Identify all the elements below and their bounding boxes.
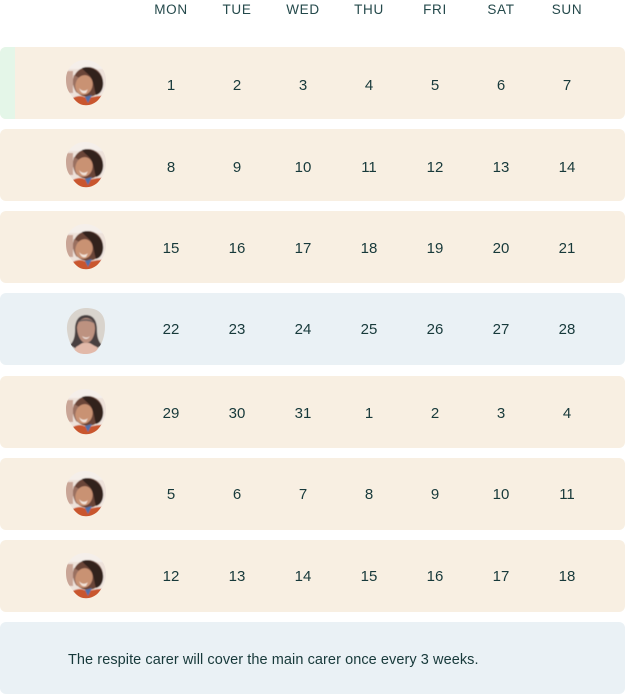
week 1 row: main carer: 4	[365, 77, 373, 94]
week 4 row: respite carer: 23	[229, 321, 245, 338]
week 7 row: main carer: 12	[163, 568, 179, 585]
week 5 row: main carer: 1	[365, 405, 373, 422]
avatar: respite carer	[67, 308, 105, 354]
week 7 row: main carer: 14	[295, 568, 311, 585]
avatar: main carer	[66, 148, 106, 188]
week 1 row: main carer: 2	[233, 77, 241, 94]
avatar: main carer	[66, 66, 106, 106]
week 3 row: main carer: 19	[427, 240, 443, 257]
week 2 row: main carer: 11	[361, 159, 377, 176]
avatar: main carer	[66, 559, 106, 598]
week 5 row: main carer: 4	[563, 405, 571, 422]
week 7 row: main carer: 13	[229, 568, 245, 585]
week 4 row: respite carer: 22	[163, 321, 179, 338]
week 1 row: main carer: 5	[431, 77, 439, 94]
week 4 row: respite carer: 24	[295, 321, 311, 338]
weekday header: THU	[354, 2, 384, 17]
week 3 row: main carer: 18	[361, 240, 377, 257]
week 3 row: main carer: 20	[493, 240, 509, 257]
week 6 row: main carer	[0, 458, 625, 530]
week 6 row: main carer: 9	[431, 486, 439, 503]
week 4 row: respite carer: 25	[361, 321, 377, 338]
week 4 row: respite carer: 26	[427, 321, 443, 338]
week 5 row: main carer: 30	[229, 405, 245, 422]
week 7 row: main carer	[0, 540, 625, 612]
avatar: main carer	[66, 477, 106, 516]
week 7 row: main carer: 16	[427, 568, 443, 585]
weekday header: WED	[286, 2, 320, 17]
week 2 row: main carer: 9	[233, 159, 241, 176]
week 2 row: main carer: 10	[295, 159, 311, 176]
week 1 row: main carer	[0, 47, 625, 119]
current week accent	[0, 47, 15, 119]
avatar: main carer	[66, 230, 106, 270]
weekday header: SUN	[552, 2, 582, 17]
avatar: main carer	[66, 395, 106, 434]
week 2 row: main carer: 13	[493, 159, 509, 176]
week 6 row: main carer: 7	[299, 486, 307, 503]
weekday header: FRI	[423, 2, 447, 17]
week 1 row: main carer: 6	[497, 77, 505, 94]
week 6 row: main carer: 6	[233, 486, 241, 503]
week 2 row: main carer: 14	[559, 159, 575, 176]
week 1 row: main carer: 7	[563, 77, 571, 94]
week 2 row: main carer: 12	[427, 159, 443, 176]
week 3 row: main carer: 21	[559, 240, 575, 257]
week 6 row: main carer: 8	[365, 486, 373, 503]
week 4 row: respite carer: 28	[559, 321, 575, 338]
week 6 row: main carer: 10	[493, 486, 509, 503]
week 2 row: main carer	[0, 129, 625, 201]
weekday header: SAT	[487, 2, 515, 17]
week 5 row: main carer: 3	[497, 405, 505, 422]
week 6 row: main carer: 11	[559, 486, 575, 503]
week 5 row: main carer	[0, 376, 625, 448]
week 1 row: main carer: 3	[299, 77, 307, 94]
week 3 row: main carer: 16	[229, 240, 245, 257]
week 7 row: main carer: 15	[361, 568, 377, 585]
week 4 row: respite carer	[0, 293, 625, 365]
week 4 row: respite carer: 27	[493, 321, 509, 338]
week 6 row: main carer: 5	[167, 486, 175, 503]
week 1 row: main carer: 1	[167, 77, 175, 94]
week 7 row: main carer: 17	[493, 568, 509, 585]
weekday header: MON	[154, 2, 188, 17]
week 5 row: main carer: 31	[295, 405, 311, 422]
week 3 row: main carer: 17	[295, 240, 311, 257]
note panel	[0, 622, 625, 694]
week 3 row: main carer: 15	[163, 240, 179, 257]
week 5 row: main carer: 29	[163, 405, 179, 422]
weekday header	[154, 2, 582, 17]
week 2 row: main carer: 8	[167, 159, 175, 176]
week 7 row: main carer: 18	[559, 568, 575, 585]
weekday header: TUE	[222, 2, 252, 17]
week 3 row: main carer	[0, 211, 625, 283]
week 5 row: main carer: 2	[431, 405, 439, 422]
note text: The respite carer will cover the main carer once every 3 weeks.	[68, 652, 479, 668]
